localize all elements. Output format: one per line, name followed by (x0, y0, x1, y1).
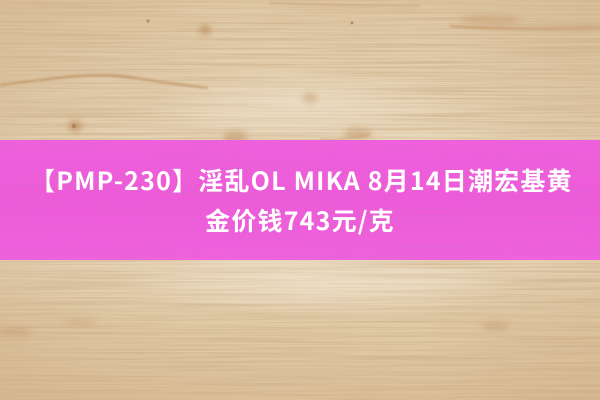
title: 【PMP-230】淫乱OL MIKA 8月14日潮宏基黄 (30, 162, 573, 198)
title: 金价钱743元/克 (205, 202, 395, 238)
title (30, 162, 573, 238)
pink band (0, 140, 600, 260)
